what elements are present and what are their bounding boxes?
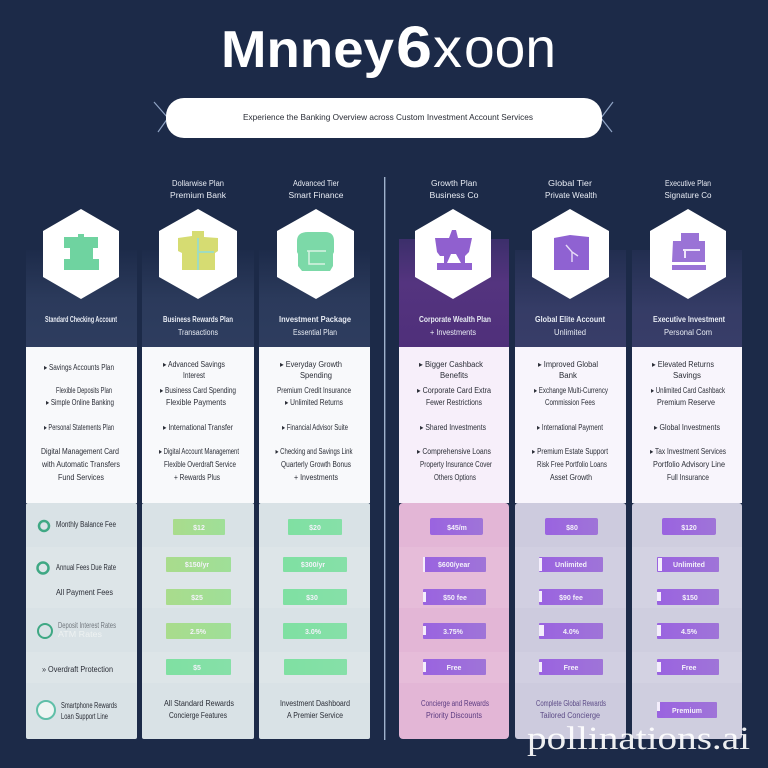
column 4 row values: 3.75%	[443, 629, 464, 636]
hexagon icon: purple building	[415, 209, 491, 299]
column 3 features: Quarterly Growth Bonus	[281, 460, 351, 469]
column 5 heading: Private Wealth	[545, 191, 597, 200]
title	[221, 15, 556, 80]
column 3 features: Spending	[300, 371, 332, 380]
column 1 features: with Automatic Transfers	[41, 460, 120, 469]
column 4 row values	[421, 518, 489, 720]
column 5 features: Bank	[559, 371, 578, 380]
column 6 row values: 4.5%	[681, 629, 698, 636]
column 3 features: ▸ Unlimited Returns	[285, 398, 343, 407]
column 6 features: Portfolio Advisory Line	[653, 460, 725, 469]
column 2 features: ▸ Digital Account Management	[159, 447, 240, 456]
column 4 features: ▸ Shared Investments	[420, 423, 486, 432]
hexagon icon: purple institution	[650, 209, 726, 299]
hexagon icon: yellow bank	[159, 209, 237, 299]
column 1 features: Fund Services	[58, 473, 104, 482]
title: 6	[396, 15, 432, 80]
column 6 label: Executive Investment	[653, 315, 725, 324]
column 1 features: ▸ Simple Online Banking	[46, 398, 114, 407]
column 4 features: Property Insurance Cover	[420, 460, 492, 469]
column 5 row values: 4.0%	[563, 629, 580, 636]
column 5 row values: Free	[564, 665, 578, 672]
column 5 row values	[536, 518, 606, 720]
column 6 features: Savings	[673, 371, 701, 380]
subtitle pill	[154, 98, 613, 138]
column 1 features: Digital Management Card	[41, 447, 119, 456]
column 1 row labels	[37, 520, 117, 721]
column 3 features: ▸ Everyday Growth	[280, 360, 342, 369]
column 5 heading	[545, 179, 597, 200]
subtitle pill: Experience the Banking Overview across Custom Investment Account Services	[243, 112, 533, 122]
column 2 label: Business Rewards Plan	[163, 315, 233, 324]
column 1 row labels: Annual Fees Due Rate	[56, 563, 116, 572]
column 2 features: ▸ Business Card Spending	[160, 386, 236, 395]
column 6 label	[653, 315, 725, 337]
column 2 row values: $12	[193, 525, 205, 532]
title: oon	[464, 16, 556, 79]
column 4 features: Benefits	[440, 371, 468, 380]
column 2 label	[163, 315, 233, 337]
column 4 features: Others Options	[434, 473, 476, 482]
column 2 row values: $150/yr	[185, 562, 209, 569]
column 4 features: ▸ Bigger Cashback	[419, 360, 484, 369]
column 5 features: ▸ Improved Global	[538, 360, 598, 369]
column 4 heading: Business Co	[430, 191, 479, 200]
column 4 label	[419, 315, 491, 337]
column 6 features: Full Insurance	[667, 473, 709, 482]
column 6 heading	[664, 179, 712, 200]
panel: column 1	[26, 209, 137, 739]
panel: column 4	[399, 179, 509, 739]
column 3 row values: 3.0%	[305, 629, 322, 636]
column 1 label: Standard Checking Account	[45, 315, 117, 324]
column 5 label	[535, 315, 605, 337]
column 4 row values: $45/m	[447, 525, 467, 532]
column 5 row values: Tailored Concierge	[540, 711, 600, 720]
column 2 label: Transactions	[178, 328, 218, 337]
column 2 features: + Rewards Plus	[174, 473, 220, 482]
column 1 row labels: » Overdraft Protection	[42, 665, 113, 674]
center divider	[384, 177, 385, 740]
column 5 row values: Unlimited	[555, 562, 587, 569]
column 2 heading: Dollarwise Plan	[172, 179, 224, 188]
column 1 features: ▸ Personal Statements Plan	[44, 423, 114, 432]
column 1 row labels: Smartphone Rewards	[61, 701, 117, 710]
column 1 row labels: Loan Support Line	[61, 712, 108, 721]
watermark: pollinations.ai	[527, 721, 750, 757]
hexagon icon: green safe	[277, 209, 354, 299]
column 5 row values: $90 fee	[559, 595, 583, 602]
column 2 heading: Premium Bank	[170, 191, 227, 200]
column 2 heading	[170, 179, 227, 200]
column 3 label: Investment Package	[279, 315, 352, 324]
column 3 row values	[280, 519, 350, 720]
column 1 row labels: Deposit Interest Rates	[58, 621, 116, 630]
hexagon icon: green bank	[43, 209, 119, 299]
column 3 features: Premium Credit Insurance	[277, 386, 351, 395]
column 2 row values: $25	[191, 595, 203, 602]
column 2 features: ▸ Advanced Savings	[163, 360, 225, 369]
column 4 row values: Priority Discounts	[426, 711, 482, 720]
column 4 row values: $600/year	[438, 562, 470, 569]
column 1 features	[41, 363, 120, 482]
column 3 features: + Investments	[294, 473, 338, 482]
column 5 label: Global Elite Account	[535, 315, 605, 324]
hexagon icon: purple vault	[532, 209, 609, 299]
column 6 heading: Executive Plan	[665, 179, 711, 188]
panel: column 2	[142, 179, 254, 739]
column 2 row values	[164, 519, 234, 720]
column 5 row values: $80	[566, 525, 578, 532]
column 4 features	[417, 360, 492, 482]
column 4 features: ▸ Corporate Card Extra	[417, 386, 491, 395]
column 6 features: ▸ Unlimited Card Cashback	[651, 386, 726, 395]
column 4 row values: Concierge and Rewards	[421, 699, 489, 708]
column 5 features: Commission Fees	[545, 398, 595, 407]
column 6 row values: Free	[682, 665, 696, 672]
column 6 label: Personal Com	[664, 328, 712, 337]
column 4 heading: Growth Plan	[431, 179, 477, 188]
column 6 row values: $150	[682, 595, 698, 602]
column 3 row values: $300/yr	[301, 562, 325, 569]
column 6 row values	[657, 518, 719, 718]
column 4 label: Corporate Wealth Plan	[419, 315, 491, 324]
column 2 row values: 2.5%	[190, 629, 207, 636]
column 5 features: ▸ Exchange Multi-Currency	[534, 386, 608, 395]
column 2 features	[159, 360, 240, 482]
column 2 features: Flexible Overdraft Service	[164, 460, 236, 469]
column 5 row values: Complete Global Rewards	[536, 699, 606, 708]
column 5 heading: Global Tier	[548, 179, 592, 188]
column 5 label: Unlimited	[554, 328, 586, 337]
column 6 features	[650, 360, 726, 482]
title: Mnney	[221, 21, 394, 79]
column 4 row values: Free	[447, 665, 461, 672]
column 3 heading: Advanced Tier	[293, 179, 339, 188]
panel: column 3	[259, 179, 370, 739]
column 1 row labels: ATM Rates	[58, 630, 102, 639]
column 1 features: Flexible Deposits Plan	[56, 386, 112, 395]
column 5 features: Risk Free Portfolio Loans	[537, 460, 607, 469]
column 4 features: Fewer Restrictions	[426, 398, 482, 407]
column 5 features	[532, 360, 609, 482]
column 3 row values: $30	[306, 595, 318, 602]
column 3 row values: Investment Dashboard	[280, 699, 350, 708]
column 6 row values: Unlimited	[673, 562, 705, 569]
column 6 features: ▸ Tax Investment Services	[650, 447, 726, 456]
column 4 row values: $50 fee	[443, 595, 467, 602]
column 1 features: ▸ Savings Accounts Plan	[44, 363, 114, 372]
column 2 features: Interest	[183, 371, 206, 380]
column 5 features: ▸ International Payment	[537, 423, 604, 432]
column 4 heading	[430, 179, 479, 200]
column 2 row values: Concierge Features	[169, 711, 227, 720]
column 3 heading: Smart Finance	[288, 191, 344, 200]
column 6 features: ▸ Global Investments	[654, 423, 720, 432]
column 3 heading	[288, 179, 344, 200]
column 5 features: ▸ Premium Estate Support	[532, 447, 609, 456]
column 4 label: + Investments	[430, 328, 476, 337]
column 6 row values: $120	[681, 525, 697, 532]
panel: column 5	[515, 179, 626, 739]
column 2 features: ▸ International Transfer	[163, 423, 233, 432]
column 1 row labels: Monthly Balance Fee	[56, 520, 116, 529]
column 5 features: Asset Growth	[550, 473, 592, 482]
column 2 row values: All Standard Rewards	[164, 699, 234, 708]
column 4 features: ▸ Comprehensive Loans	[417, 447, 491, 456]
column 6 heading: Signature Co	[664, 191, 712, 200]
column 3 row values: $20	[309, 525, 321, 532]
column 6 row values: Premium	[672, 708, 702, 715]
panel: column 6	[632, 179, 742, 739]
column 3 features: ▸ Checking and Savings Link	[276, 447, 353, 456]
column 2 row values: $5	[193, 665, 201, 672]
title: x	[433, 16, 462, 79]
column 6 features: Premium Reserve	[657, 398, 715, 407]
column 3 features	[276, 360, 353, 482]
column 3 features: ▸ Financial Advisor Suite	[282, 423, 348, 432]
column 3 label: Essential Plan	[293, 328, 337, 337]
column 6 features: ▸ Elevated Returns	[652, 360, 714, 369]
column 3 label	[279, 315, 352, 337]
column 3 row values: A Premier Service	[287, 711, 343, 720]
column 1 row labels: All Payment Fees	[56, 588, 113, 597]
column 2 features: Flexible Payments	[166, 398, 226, 407]
